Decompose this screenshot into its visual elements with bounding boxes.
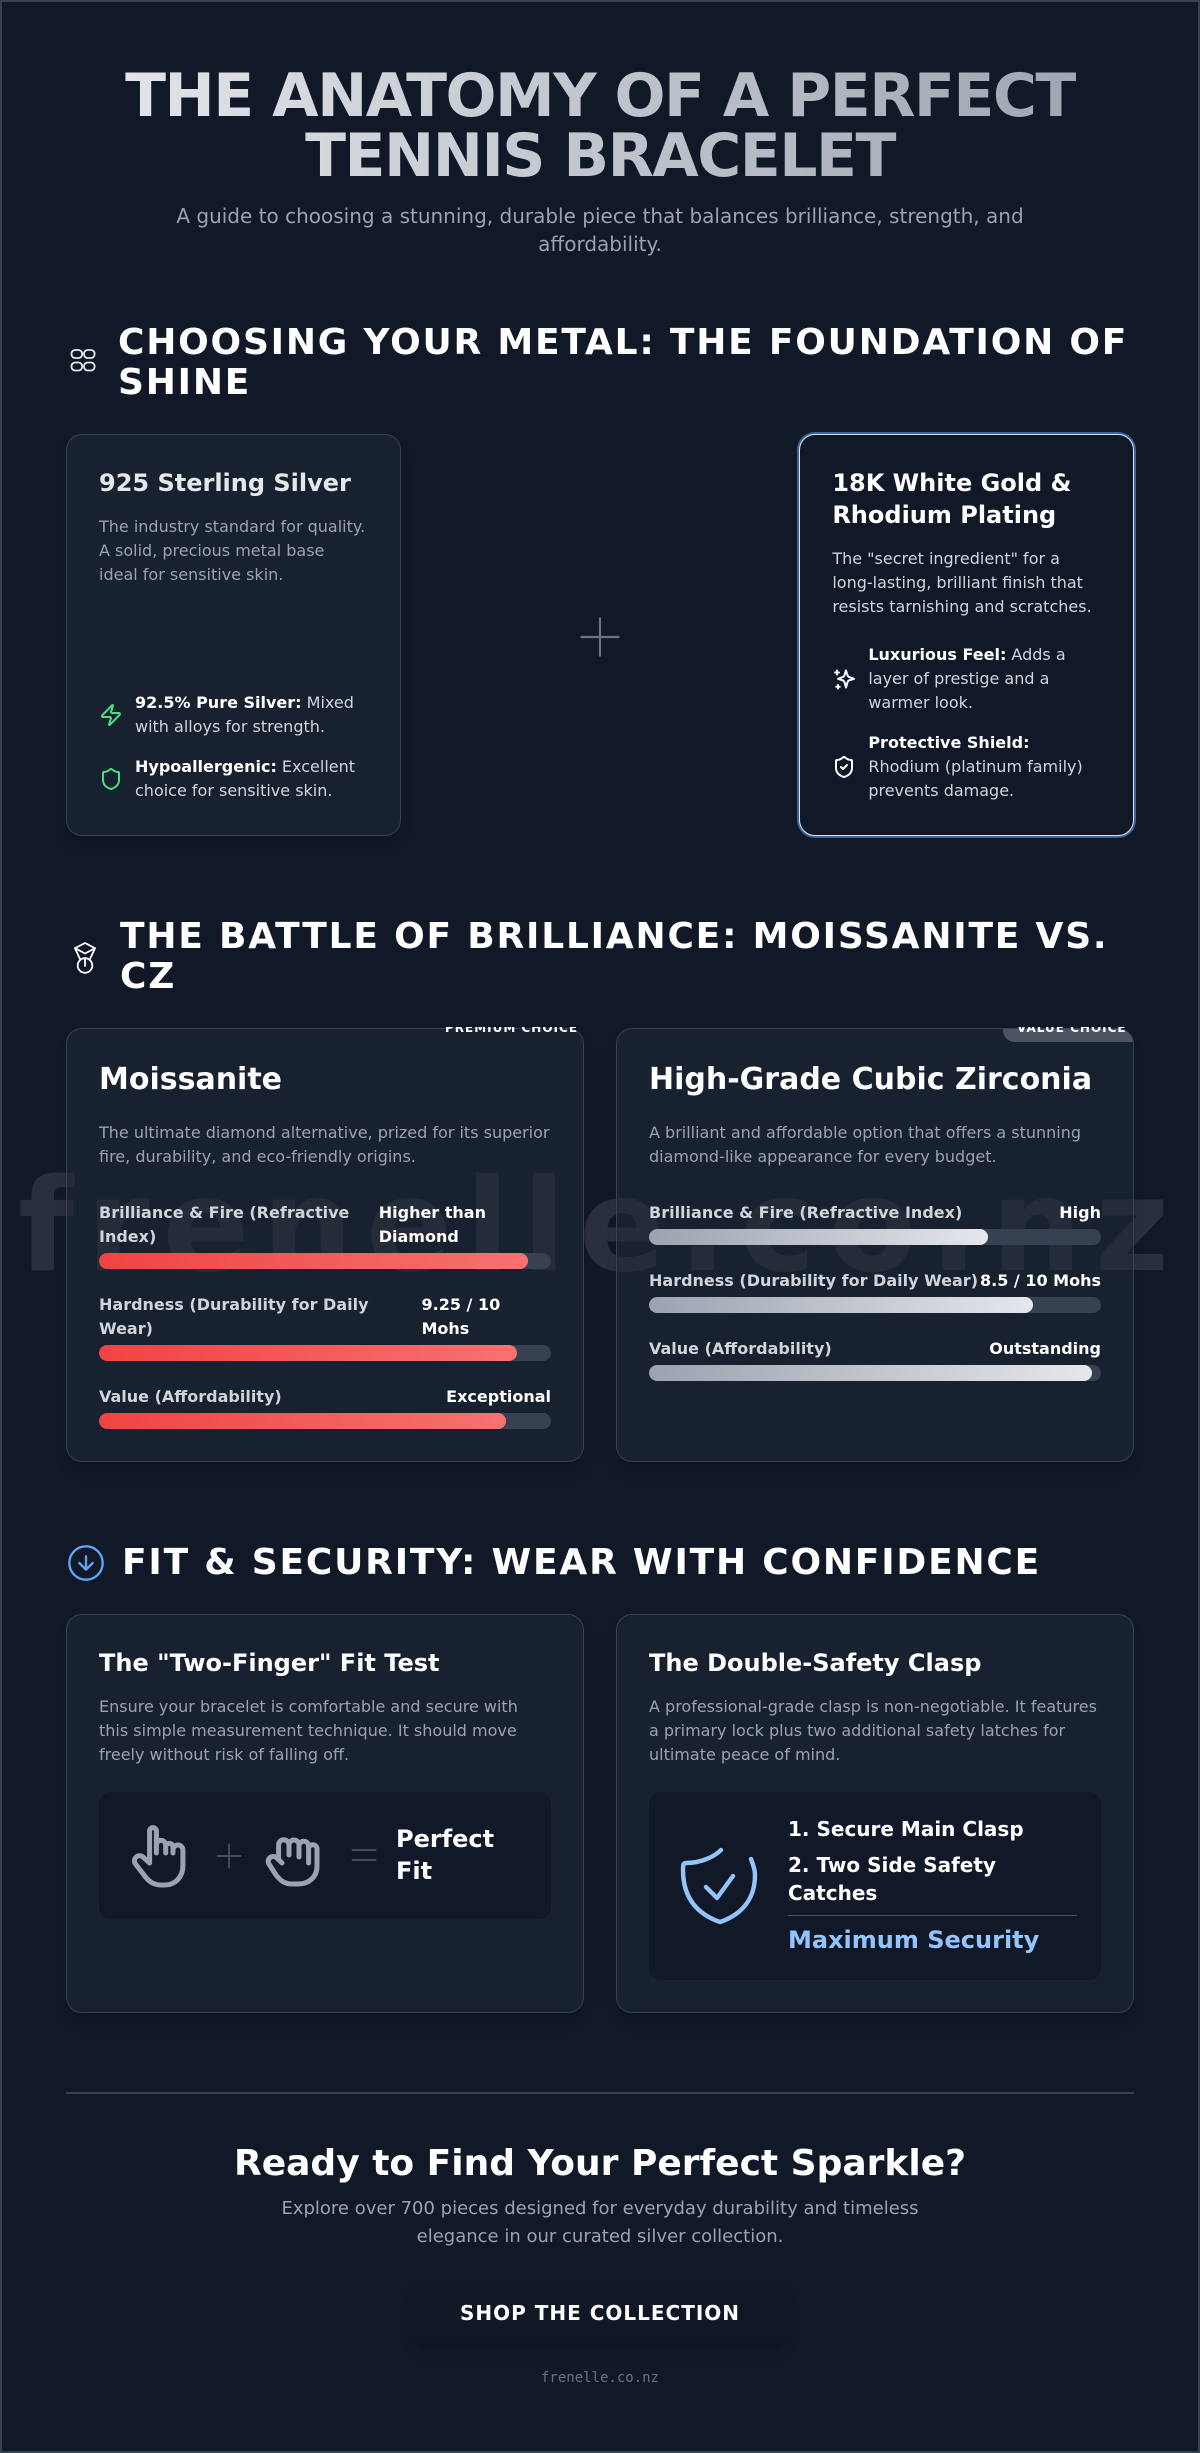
heading text: CHOOSING YOUR METAL: THE FOUNDATION OF — [118, 322, 1128, 363]
metric: value — [99, 1387, 551, 1429]
metric: value: Value (Affordability) — [649, 1339, 832, 1358]
card title: Moissanite — [99, 1062, 282, 1097]
metric: brilliance: High — [1059, 1203, 1101, 1222]
feature: protective shield: Protective Shield: Rhodium (platinum family) prevents damage. — [868, 733, 1083, 800]
divider — [66, 2092, 1134, 2094]
metric: brilliance — [99, 1203, 551, 1269]
metric: value: Outstanding — [989, 1339, 1101, 1358]
heading text: THE BATTLE OF BRILLIANCE: MOISSANITE VS. — [120, 916, 1108, 957]
panel: moissanite — [66, 1028, 584, 1462]
card title: 18K White Gold & Rhodium Plating — [832, 469, 1071, 529]
feature: pure silver: 92.5% Pure Silver: Mixed with alloys for strength. — [135, 693, 354, 736]
heading text: FIT & SECURITY: WEAR WITH CONFIDENCE — [122, 1542, 1041, 1583]
metric: value: Exceptional — [446, 1387, 551, 1406]
section heading: metal — [70, 322, 1128, 403]
icon: equals — [352, 1849, 376, 1861]
panel: cubic zirconia — [616, 1028, 1134, 1462]
card description: The industry standard for quality. A solid, precious metal base ideal for sensitive skin. — [99, 517, 365, 584]
card title: High-Grade Cubic Zirconia — [649, 1062, 1092, 1097]
subtitle: affordability. — [538, 232, 662, 256]
clasp steps: 1. Secure Main Clasp — [788, 1817, 1024, 1841]
card title: 925 Sterling Silver — [99, 469, 351, 497]
heading text: SHINE — [118, 362, 251, 403]
panel: two-finger fit test — [66, 1614, 584, 2013]
title — [66, 66, 1134, 186]
heading text: CZ — [120, 956, 176, 997]
icon: plus between metals — [580, 617, 620, 657]
panel: double-safety clasp — [616, 1614, 1134, 2013]
subtitle — [176, 204, 1024, 256]
metric: brilliance: Higher than Diamond — [379, 1203, 486, 1246]
panel: 925 sterling silver — [66, 434, 401, 836]
result label: Fit — [396, 1857, 432, 1885]
metric: brilliance: Brilliance & Fire (Refractive Index) — [649, 1203, 962, 1222]
clasp steps: 2. Two Side Safety Catches — [788, 1853, 996, 1905]
metric: hardness: 8.5 / 10 Mohs — [980, 1271, 1101, 1290]
card title: The "Two-Finger" Fit Test — [99, 1649, 439, 1677]
call to action text: Explore over 700 pieces designed for everyday durability and timeless — [281, 2198, 919, 2219]
clasp diagram — [649, 1792, 1101, 1980]
badge background — [1003, 1028, 1133, 1042]
metric: brilliance — [649, 1203, 1101, 1245]
panel: 18k white gold — [799, 434, 1134, 836]
card description: Ensure your bracelet is comfortable and secure with this simple measurement technique. It should move freely without risk of falling off. — [99, 1697, 518, 1764]
heading text — [118, 322, 1128, 403]
card title: The Double-Safety Clasp — [649, 1649, 981, 1677]
metric: hardness — [649, 1271, 1101, 1313]
button: shop the collection — [412, 2283, 788, 2343]
section heading: fit and security — [68, 1542, 1041, 1583]
metric: value — [649, 1339, 1101, 1381]
title: TENNIS BRACELET — [305, 121, 895, 191]
card description: The "secret ingredient" for a long-lasting, brilliant finish that resists tarnishing and scratches. — [832, 549, 1092, 616]
section heading: stones — [74, 916, 1108, 997]
feature list — [834, 645, 1083, 800]
subtitle: A guide to choosing a stunning, durable piece that balances brilliance, strength, and — [176, 204, 1024, 228]
metric: hardness: Hardness (Durability for Daily Wear) — [649, 1271, 978, 1290]
feature: hypoallergenic: Hypoallergenic: Excellent choice for sensitive skin. — [135, 757, 355, 800]
feature list — [100, 693, 355, 800]
icon: pointing hand — [132, 1825, 186, 1888]
card description: A brilliant and affordable option that offers a stunning diamond-like appearance for every budget. — [649, 1123, 1081, 1166]
card description: The ultimate diamond alternative, prized for its superior fire, durability, and eco-friendly origins. — [99, 1123, 549, 1166]
call to action text — [281, 2198, 919, 2247]
metric: hardness: Hardness (Durability for Daily Wear) — [99, 1295, 369, 1338]
footer url: frenelle.co.nz — [541, 2370, 659, 2386]
result: maximum security — [788, 1915, 1077, 1956]
button: shop the collection: SHOP THE COLLECTION — [460, 2301, 740, 2325]
metric: brilliance: Brilliance & Fire (Refractive Index) — [99, 1203, 349, 1246]
icon: grabbing hand — [266, 1837, 320, 1886]
metric: hardness: 9.25 / 10 Mohs — [422, 1295, 500, 1338]
result label: Perfect — [396, 1825, 494, 1853]
fit diagram — [99, 1792, 551, 1919]
title: THE ANATOMY OF A PERFECT — [125, 61, 1075, 131]
metric: hardness — [99, 1295, 551, 1361]
feature: luxurious feel: Luxurious Feel: Adds a layer of prestige and a warmer look. — [868, 645, 1066, 712]
call to action heading: Ready to Find Your Perfect Sparkle? — [234, 2143, 966, 2184]
clasp steps — [788, 1817, 1077, 1954]
result: maximum security: Maximum Security — [788, 1926, 1039, 1954]
result label — [396, 1825, 494, 1885]
icon: plus — [216, 1844, 242, 1868]
icon: shield with check — [680, 1848, 758, 1924]
metric: value: Value (Affordability) — [99, 1387, 282, 1406]
call to action text: elegance in our curated silver collection. — [417, 2226, 783, 2247]
icon: arrow down circle — [68, 1545, 104, 1581]
heading text — [120, 916, 1108, 997]
card description: A professional-grade clasp is non-negotiable. It features a primary lock plus two additional safety latches for ultimate peace of mind. — [649, 1697, 1097, 1764]
background watermark: frenelle.co.nz — [18, 1152, 1182, 1301]
icon: gem with circle — [74, 942, 96, 974]
icon: chain links — [70, 349, 96, 372]
